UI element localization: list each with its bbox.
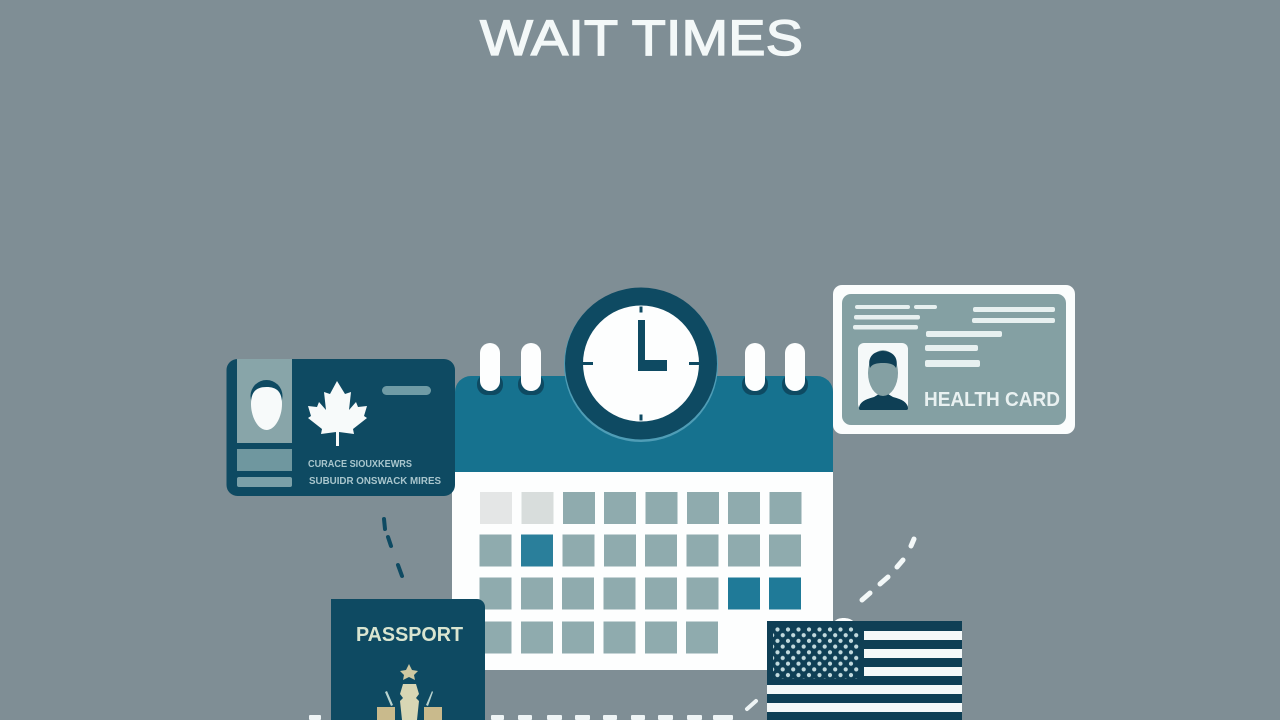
canton stars xyxy=(773,626,859,679)
passport emblem xyxy=(377,664,442,720)
photo panel xyxy=(237,359,292,443)
dashed path: bottom xyxy=(309,701,756,720)
maple leaf xyxy=(308,381,367,446)
health card label: HEALTH CARD xyxy=(924,389,1060,411)
title: WAIT TIMES xyxy=(480,10,803,66)
dashed path: flag to health card xyxy=(862,539,914,600)
ID card with maple leaf: SUBUIDR ONSWACK MIRES xyxy=(309,476,441,487)
clock hands and ticks xyxy=(638,320,667,371)
US flag xyxy=(767,618,962,720)
calendar body xyxy=(452,470,833,670)
card text: CURACE SIOUXKEWRS xyxy=(308,459,412,470)
dashed path: card to passport xyxy=(384,519,402,576)
calendar day grid xyxy=(480,492,802,654)
ID card with maple leaf xyxy=(226,359,455,496)
clock xyxy=(564,288,718,442)
calendar xyxy=(452,343,833,670)
calendar header xyxy=(455,376,833,472)
calendar binding rings xyxy=(477,343,808,395)
health card xyxy=(833,285,1075,434)
health card photo xyxy=(858,343,908,410)
flag stripes xyxy=(767,631,962,712)
pill label xyxy=(382,386,431,395)
portrait head xyxy=(250,380,282,430)
passport xyxy=(331,599,485,720)
passport label: PASSPORT xyxy=(356,624,463,646)
health card info lines xyxy=(853,305,1055,367)
info bars xyxy=(237,449,292,471)
